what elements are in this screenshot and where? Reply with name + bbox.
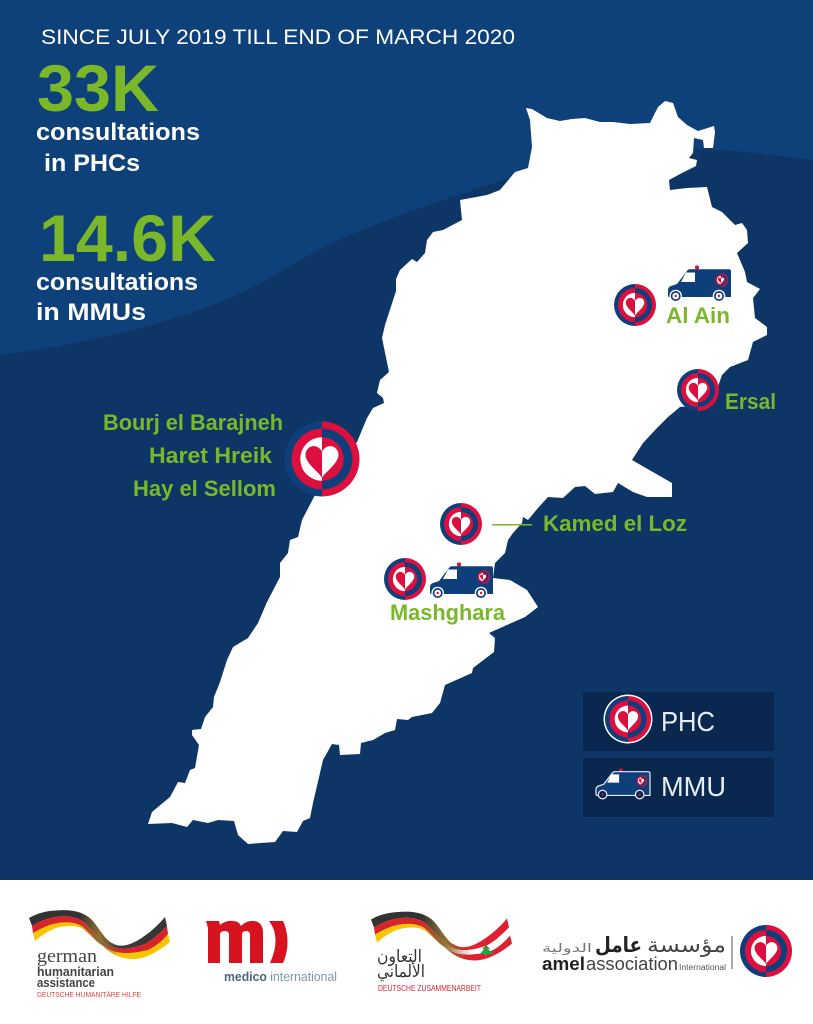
icon: large PHC marker Beirut <box>284 422 360 496</box>
stat caption line 1: consultations <box>36 269 198 296</box>
logo subline: DEUTSCHE HUMANITÄRE HILFE <box>37 991 141 999</box>
legend icon PHC <box>605 696 651 742</box>
stat number 14.6K: 14.6K <box>39 201 216 275</box>
label Hay el Sellom: Hay el Sellom <box>133 476 276 501</box>
legend: MMU <box>583 758 774 817</box>
label Bourj el Barajneh: Bourj el Barajneh <box>103 410 283 435</box>
flag ribbon <box>29 910 170 959</box>
stat: 33K consultations in PHCs <box>36 51 200 177</box>
stat caption line 2: in PHCs <box>44 150 140 177</box>
stat: 14.6K consultations in MMUs <box>36 201 216 326</box>
label Haret Hreik: Haret Hreik <box>149 443 273 468</box>
logo: medico international <box>206 921 337 984</box>
icon: PHC marker Al Ain <box>614 284 656 326</box>
wordmark international: International <box>679 963 726 972</box>
legend icon MMU <box>596 768 650 799</box>
legend ring PHC <box>604 694 652 744</box>
label Al Ain: Al Ain <box>666 303 730 328</box>
Arabic wordmark line 1: التعاون <box>377 947 422 966</box>
legend box MMU <box>583 758 774 817</box>
map of Lebanon <box>148 101 767 844</box>
mi mark <box>206 921 288 963</box>
Arabic wordmark line 2: الألماني <box>377 961 425 982</box>
location labels: Beirut suburbs <box>103 410 283 501</box>
icon: MMU van Mashghara <box>430 562 493 599</box>
wordmark association: association <box>586 954 678 974</box>
title: SINCE JULY 2019 TILL END OF MARCH 2020 <box>41 25 515 49</box>
stat caption line 2: in MMUs <box>36 299 146 326</box>
legend box PHC <box>583 692 774 751</box>
label Mashghara: Mashghara <box>390 600 506 625</box>
logo: Amel Association International <box>542 925 792 977</box>
Arabic bold word: عامل <box>595 934 642 957</box>
icon: cedar <box>480 945 494 956</box>
wordmark amel: amel <box>542 954 585 974</box>
Arabic small word: الدولية <box>542 941 592 956</box>
label Ersal: Ersal <box>725 389 776 414</box>
legend text PHC: PHC <box>661 706 715 737</box>
Arabic regular word: مؤسسة <box>647 934 726 957</box>
logo word german: german <box>37 946 98 967</box>
logo word humanitarian: humanitarian <box>37 964 114 979</box>
stat caption line 1: consultations <box>36 119 200 146</box>
logo: German humanitarian assistance <box>29 910 170 999</box>
legend: PHC <box>583 692 774 751</box>
icon: PHC marker Kamed el Loz <box>440 503 482 545</box>
icon: PHC marker Mashghara <box>384 558 426 600</box>
Germany Lebanon ribbon <box>371 912 512 960</box>
legend text MMU: MMU <box>661 771 726 802</box>
icon: MMU van Al Ain <box>668 266 731 302</box>
logo subline: DEUTSCHE ZUSAMMENARBEIT <box>378 984 481 993</box>
logo wordmark medico international: medico international <box>224 969 337 984</box>
icon: Amel emblem <box>740 925 792 977</box>
logo: Deutsche Zusammenarbeit <box>371 912 512 993</box>
footer panel <box>0 880 813 1024</box>
icon: PHC marker Ersal <box>677 369 719 411</box>
label Kamed el Loz: Kamed el Loz <box>543 511 687 536</box>
leader line Kamed el Loz <box>492 524 532 526</box>
lighter wave background <box>0 0 813 355</box>
logo word assistance: assistance <box>37 975 95 990</box>
divider <box>732 936 733 969</box>
stat number 33K: 33K <box>37 51 159 125</box>
